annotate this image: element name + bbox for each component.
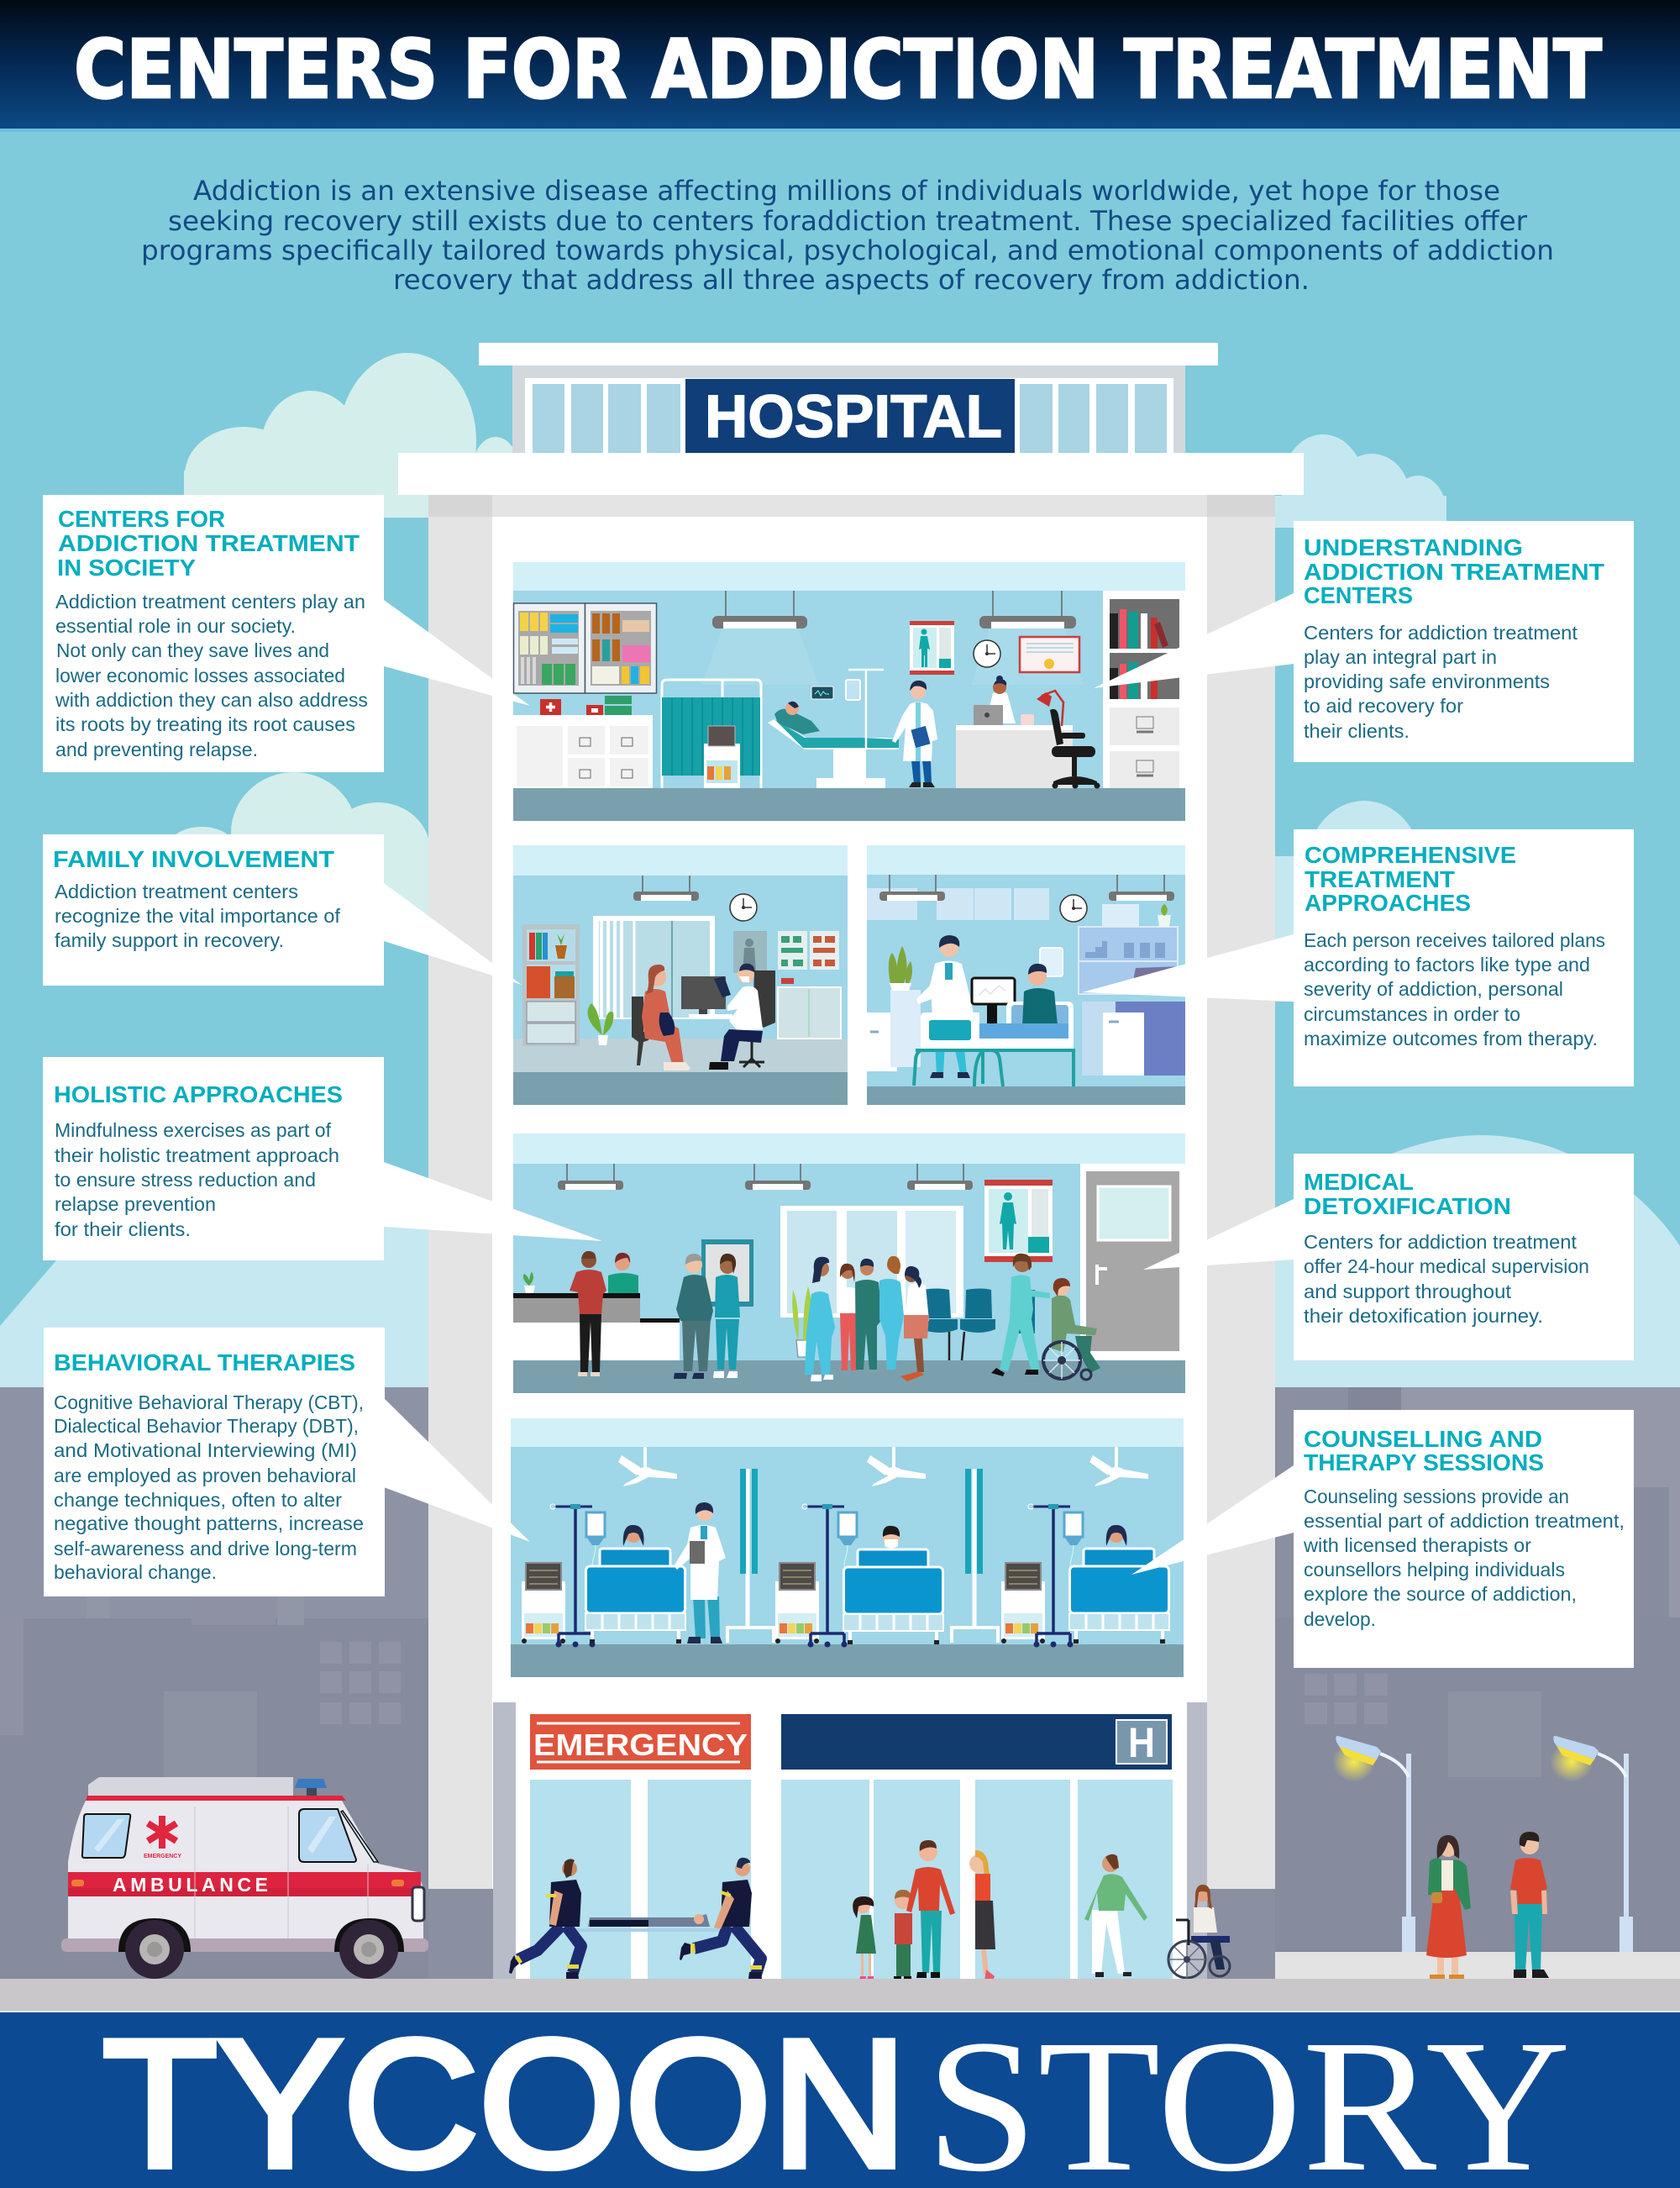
body text: are employed as proven behavioral: [54, 1465, 356, 1486]
heading: BEHAVIORAL THERAPIES: [54, 1349, 355, 1375]
body text: counsellors helping individuals: [1304, 1559, 1565, 1581]
nurse and desk: [956, 676, 1073, 788]
heading: COUNSELLING AND: [1304, 1426, 1542, 1452]
ambulance label: AMBULANCE: [113, 1874, 268, 1896]
body text: behavioral change.: [54, 1561, 217, 1583]
body text: Cognitive Behavioral Therapy (CBT),: [54, 1391, 364, 1413]
doctor seated: [709, 964, 775, 1070]
hospital entrance sign: [781, 1714, 1172, 1770]
body text: maximize outcomes from therapy.: [1304, 1028, 1598, 1049]
panel: holistic approaches: [43, 1057, 384, 1260]
curtain: [662, 680, 761, 788]
ceiling fans: [618, 1447, 1148, 1486]
glass cabinet: [1079, 904, 1183, 994]
star of life: EMERGENCY: [144, 1854, 181, 1859]
heading: THERAPY SESSIONS: [1304, 1449, 1544, 1475]
cloud middle right: [1275, 801, 1421, 1002]
heading: DETOXIFICATION: [1304, 1193, 1511, 1219]
lobby window: [780, 1206, 963, 1318]
body text: their detoxification journey.: [1304, 1305, 1543, 1327]
drip bag: [1040, 948, 1063, 976]
roof slab: [398, 453, 1304, 495]
tall plant: [792, 1286, 813, 1357]
wall charts: [733, 931, 839, 973]
wheels: [118, 1918, 404, 1979]
heading: [1304, 1426, 1544, 1475]
body text: [1303, 1486, 1625, 1630]
certificate: [1020, 637, 1079, 672]
ambulance windows: [82, 1809, 378, 1862]
body text: according to factors like type and: [1304, 954, 1590, 976]
heading: MEDICAL: [1304, 1169, 1414, 1195]
vital monitor: [972, 978, 1015, 1028]
body text: severity of addiction, personal: [1304, 978, 1563, 1000]
body text: its roots by treating its root causes: [55, 713, 355, 735]
office chair: [1050, 709, 1100, 788]
emergency sign: EMERGENCY: [533, 1728, 748, 1762]
doctor with patient: [916, 935, 974, 1078]
body text: and preventing relapse.: [55, 739, 258, 760]
nurse pushing wheelchair: [991, 1254, 1050, 1376]
waiting chairs: [921, 1289, 1035, 1360]
man at reception: [570, 1251, 606, 1376]
hospital sign: HOSPITAL: [705, 384, 1002, 450]
doctor with clipboard: [674, 1502, 726, 1644]
ceiling lights: [701, 591, 1084, 685]
doctor standing: [892, 681, 937, 787]
man on sidewalk: [1510, 1832, 1549, 1978]
pale hill right: [1275, 1135, 1680, 1388]
emergency sign: [530, 1714, 751, 1770]
heading: COMPREHENSIVE: [1305, 842, 1516, 868]
woman behind door frame: [969, 1850, 995, 1980]
header band: [0, 0, 1680, 132]
heading: [57, 506, 360, 581]
beds: [585, 1549, 1169, 1644]
upper cabinets: [867, 888, 1049, 920]
body text: Centers for addiction treatment: [1304, 1231, 1578, 1253]
low cabinet: [778, 978, 841, 1039]
city background: [0, 1387, 1680, 1979]
body text: [54, 1391, 364, 1583]
clock: [1060, 895, 1087, 922]
body text: [55, 881, 341, 951]
heading: [1304, 534, 1604, 608]
body text: family support in recovery.: [55, 929, 284, 951]
body text: with licensed therapists or: [1303, 1534, 1531, 1556]
body text: explore the source of addiction,: [1304, 1583, 1577, 1605]
heading: HOLISTIC APPROACHES: [54, 1081, 343, 1107]
body text: essential part of addiction treatment,: [1304, 1510, 1625, 1532]
street lamps: [1332, 1736, 1633, 1952]
panel: understanding centers: [1294, 521, 1634, 762]
body text: with addiction they can also address: [55, 689, 368, 711]
intro paragraph: recovery that address all three aspects of recovery from addiction.: [393, 264, 1310, 296]
cloud middle left: [166, 772, 430, 924]
room 1: ward and office: [513, 562, 1185, 821]
man in green seen from behind: [1084, 1854, 1147, 1977]
intro paragraph: Addiction is an extensive disease affecting millions of individuals worldwide, yet hope for those: [193, 175, 1500, 207]
body text: play an integral part in: [1304, 646, 1497, 668]
desk lamp: [1037, 691, 1063, 726]
purple cupboard: [1082, 1002, 1185, 1076]
clock: [730, 894, 757, 921]
heading: TREATMENT: [1305, 866, 1455, 892]
body text: Mindfulness exercises as part of: [55, 1119, 332, 1141]
woman on sidewalk: [1426, 1835, 1471, 1980]
hospital bed with patient: [914, 964, 1075, 1086]
medicine cabinet: [514, 603, 657, 693]
patient woman seated: [632, 965, 690, 1070]
room 2a: consultation: [513, 845, 848, 1105]
building facade: [428, 495, 1275, 1979]
body text: self-awareness and drive long-term: [54, 1538, 357, 1559]
glass doors: [530, 1780, 1173, 1979]
body text: offer 24-hour medical supervision: [1304, 1255, 1589, 1277]
body text: Each person receives tailored plans: [1304, 929, 1605, 951]
room 2b: treatment: [867, 845, 1185, 1105]
heading: IN SOCIETY: [57, 555, 196, 581]
patients: [618, 1525, 1135, 1565]
body text: for their clients.: [55, 1218, 191, 1240]
body text: essential role in our society.: [55, 615, 296, 637]
room 4: patient ward: [511, 1418, 1184, 1677]
heading: ADDICTION TREATMENT: [1304, 559, 1604, 585]
panel: medical detoxification: [1294, 1154, 1634, 1360]
panel: counselling and therapy: [1294, 1410, 1634, 1668]
body text: [1304, 929, 1605, 1049]
intro paragraph: programs specifically tailored towards physical, psychological, and emotional components of addiction: [141, 234, 1554, 266]
counter with drawers: [513, 715, 653, 788]
patient bed: [768, 670, 899, 788]
panel: family involvement: [43, 834, 384, 986]
heading: UNDERSTANDING: [1304, 534, 1523, 560]
framed picture: [701, 1239, 753, 1307]
window with blinds: [593, 916, 715, 1019]
body text: Centers for addiction treatment: [1304, 622, 1578, 644]
body text: providing safe environments: [1304, 671, 1550, 692]
bumper: [61, 1938, 428, 1952]
cloud upper right: [1275, 434, 1446, 528]
body text: and Motivational Interviewing (MI): [54, 1439, 357, 1461]
hospital entrance sign: H: [1128, 1719, 1155, 1766]
sky background: [0, 129, 1680, 1389]
sidewalk right: [1275, 1952, 1680, 1979]
body text: to aid recovery for: [1304, 695, 1463, 717]
wheelchair patient: [1043, 1278, 1100, 1380]
body text: Addiction treatment centers play an: [55, 591, 365, 613]
heading: CENTERS: [1304, 582, 1413, 608]
body text: [1304, 1231, 1589, 1327]
staff group: [805, 1256, 929, 1381]
heading: [1304, 1169, 1511, 1219]
paramedics with stretcher: [509, 1858, 762, 1979]
heading: [1305, 842, 1516, 916]
woman in wheelchair: [1168, 1885, 1230, 1978]
roof penthouse: [479, 343, 1218, 454]
clock: [974, 640, 1000, 667]
pavement: [0, 1979, 1680, 2011]
body text: [1304, 622, 1578, 742]
panel: comprehensive approaches: [1294, 829, 1634, 1086]
body text: change techniques, often to alter: [54, 1489, 342, 1511]
ceiling lights: [879, 875, 1174, 901]
receptionist: [608, 1253, 638, 1293]
body text: relapse prevention: [55, 1193, 216, 1215]
body text: negative thought patterns, increase: [54, 1512, 364, 1534]
reception desk: [513, 1272, 680, 1360]
body text: Addiction treatment centers: [55, 881, 298, 902]
body text: recognize the vital importance of: [55, 905, 341, 927]
star of life: [144, 1816, 181, 1859]
body text: lower economic losses associated: [55, 665, 345, 686]
ceiling lights: [558, 1164, 973, 1190]
monitor carts: [522, 1563, 1045, 1644]
body chart poster: [984, 1180, 1053, 1262]
panel: centers in society: [43, 495, 384, 772]
old man and nurse: [674, 1254, 740, 1379]
potted plant: [588, 1003, 613, 1045]
heading: APPROACHES: [1305, 890, 1471, 916]
curtain rails: [727, 1469, 998, 1643]
ground floor entrance: [509, 1714, 1230, 1980]
panel: behavioral therapies: [44, 1328, 385, 1596]
room 3: reception and lobby: [513, 1133, 1185, 1393]
body text: their holistic treatment approach: [55, 1144, 339, 1166]
body text: circumstances in order to: [1304, 1003, 1520, 1025]
body text: their clients.: [1304, 720, 1410, 742]
body text: [55, 1119, 339, 1240]
footer band: [0, 2001, 1680, 2188]
computer monitor: [681, 976, 732, 1019]
heading: FAMILY INVOLVEMENT: [53, 846, 334, 872]
side cabinet and plant: [867, 946, 921, 1071]
body text: and support throughout: [1304, 1281, 1512, 1302]
footer brand: [102, 2001, 1571, 2188]
ambulance: [61, 1777, 428, 1979]
heading: CENTERS FOR: [58, 506, 225, 532]
wall poster body chart: [910, 621, 954, 675]
door: [1080, 1164, 1185, 1360]
shelf with folders: [522, 924, 580, 1046]
body text: develop.: [1304, 1608, 1376, 1630]
body text: to ensure stress reduction and: [55, 1169, 316, 1191]
callout pointers: [384, 593, 1294, 1575]
body text: Dialectical Behavior Therapy (DBT),: [54, 1415, 359, 1437]
intro paragraph: [141, 175, 1554, 296]
bookshelf and drawers: [1103, 591, 1185, 788]
body text: [55, 591, 368, 760]
ceiling light: [633, 876, 699, 901]
heading: ADDICTION TREATMENT: [58, 530, 360, 556]
family: [853, 1840, 955, 1980]
intro paragraph: seeking recovery still exists due to centers foraddiction treatment. These specialized facilities offer: [168, 205, 1528, 237]
pale hill left: [0, 1210, 428, 1388]
iv stands: [550, 1504, 1083, 1647]
cloud upper left: [184, 353, 519, 529]
body text: Not only can they save lives and: [56, 639, 329, 661]
first aid kits: [540, 696, 632, 715]
body text: Counseling sessions provide an: [1304, 1486, 1569, 1507]
